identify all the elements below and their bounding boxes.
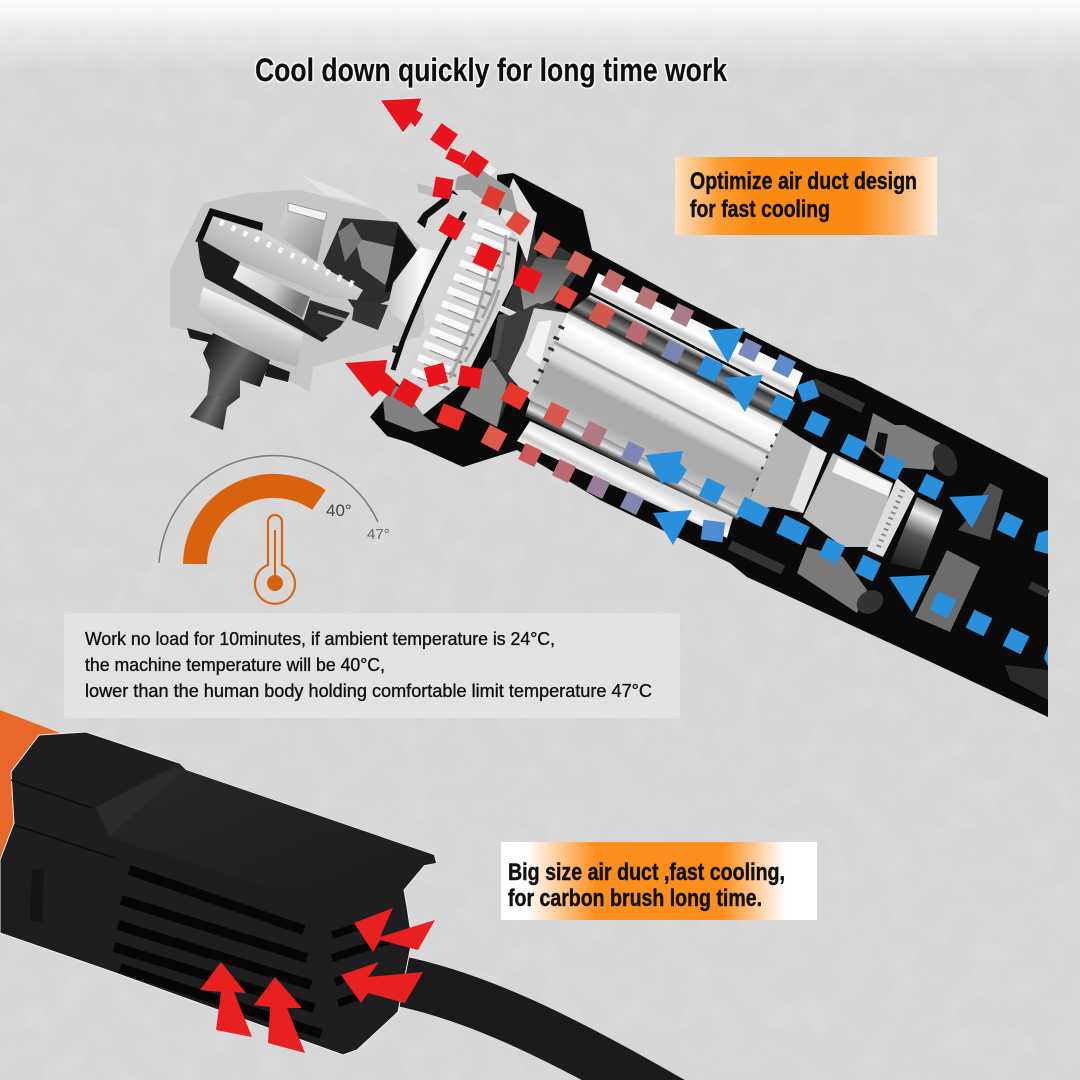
crown gear bbox=[203, 217, 363, 300]
text panel: test explanation: the machine temperature will be 40°C, bbox=[85, 655, 385, 675]
grinder rear end photo bbox=[0, 710, 690, 1080]
end vents bbox=[332, 922, 390, 1003]
gauge orange arc bbox=[195, 486, 319, 564]
fan separator bbox=[393, 212, 465, 370]
front cavity bbox=[383, 158, 585, 432]
gauge label 40: 40° bbox=[326, 501, 352, 520]
orange body bbox=[0, 710, 60, 862]
temperature gauge bbox=[159, 456, 390, 604]
black tail cap bbox=[0, 732, 436, 1055]
red intake arrows bbox=[200, 908, 435, 1053]
text panel: test explanation: lower than the human body holding comfortable limit temperature 47°C bbox=[85, 681, 652, 701]
pinion bbox=[323, 218, 417, 313]
brush holders bbox=[730, 383, 1048, 700]
vent slots bbox=[114, 870, 321, 1034]
title: Cool down quickly for long time work bbox=[255, 52, 727, 88]
gauge label 47: 47° bbox=[367, 526, 390, 543]
clamp disk bbox=[197, 287, 303, 367]
upper rail bbox=[567, 295, 793, 425]
callout: air duct design: Optimize air duct design bbox=[690, 168, 917, 195]
upper stator strip bbox=[590, 273, 803, 397]
transition airflow squares bbox=[552, 286, 796, 515]
icon: thermometer bbox=[255, 515, 295, 604]
fan bbox=[397, 215, 518, 415]
text panel: test explanation bbox=[64, 613, 680, 718]
callout: big air duct: Big size air duct ,fast cooling, bbox=[508, 859, 785, 886]
lower stator strip bbox=[517, 421, 733, 538]
angle grinder cutaway bbox=[170, 123, 1048, 717]
lower rail bbox=[525, 400, 745, 520]
motor housing bbox=[370, 173, 1048, 717]
red exhaust arrow top bbox=[380, 98, 424, 133]
gear head housing bbox=[170, 176, 445, 430]
power cable bbox=[395, 980, 690, 1080]
blue airflow squares bbox=[697, 356, 1048, 666]
commutator end bbox=[745, 425, 943, 570]
callout: big air duct bbox=[501, 842, 817, 920]
rotor bbox=[530, 313, 782, 510]
side nuts bbox=[187, 328, 212, 343]
armature bristles bbox=[497, 303, 567, 400]
blue airflow arrows bbox=[645, 328, 989, 612]
red exhaust arrow front bbox=[345, 360, 397, 397]
bearing bbox=[387, 247, 445, 327]
red airflow squares bbox=[393, 123, 625, 467]
callout: air duct design bbox=[675, 157, 937, 235]
gear layers bbox=[197, 237, 328, 342]
gauge outer arc bbox=[159, 456, 378, 563]
callout: air duct design: for fast cooling bbox=[690, 196, 830, 223]
gear cover block bbox=[277, 203, 327, 262]
callout: big air duct: for carbon brush long time. bbox=[508, 885, 762, 912]
text panel: test explanation: Work no load for 10minutes, if ambient temperature is 24°C, bbox=[85, 629, 555, 649]
spindle bbox=[203, 333, 270, 397]
